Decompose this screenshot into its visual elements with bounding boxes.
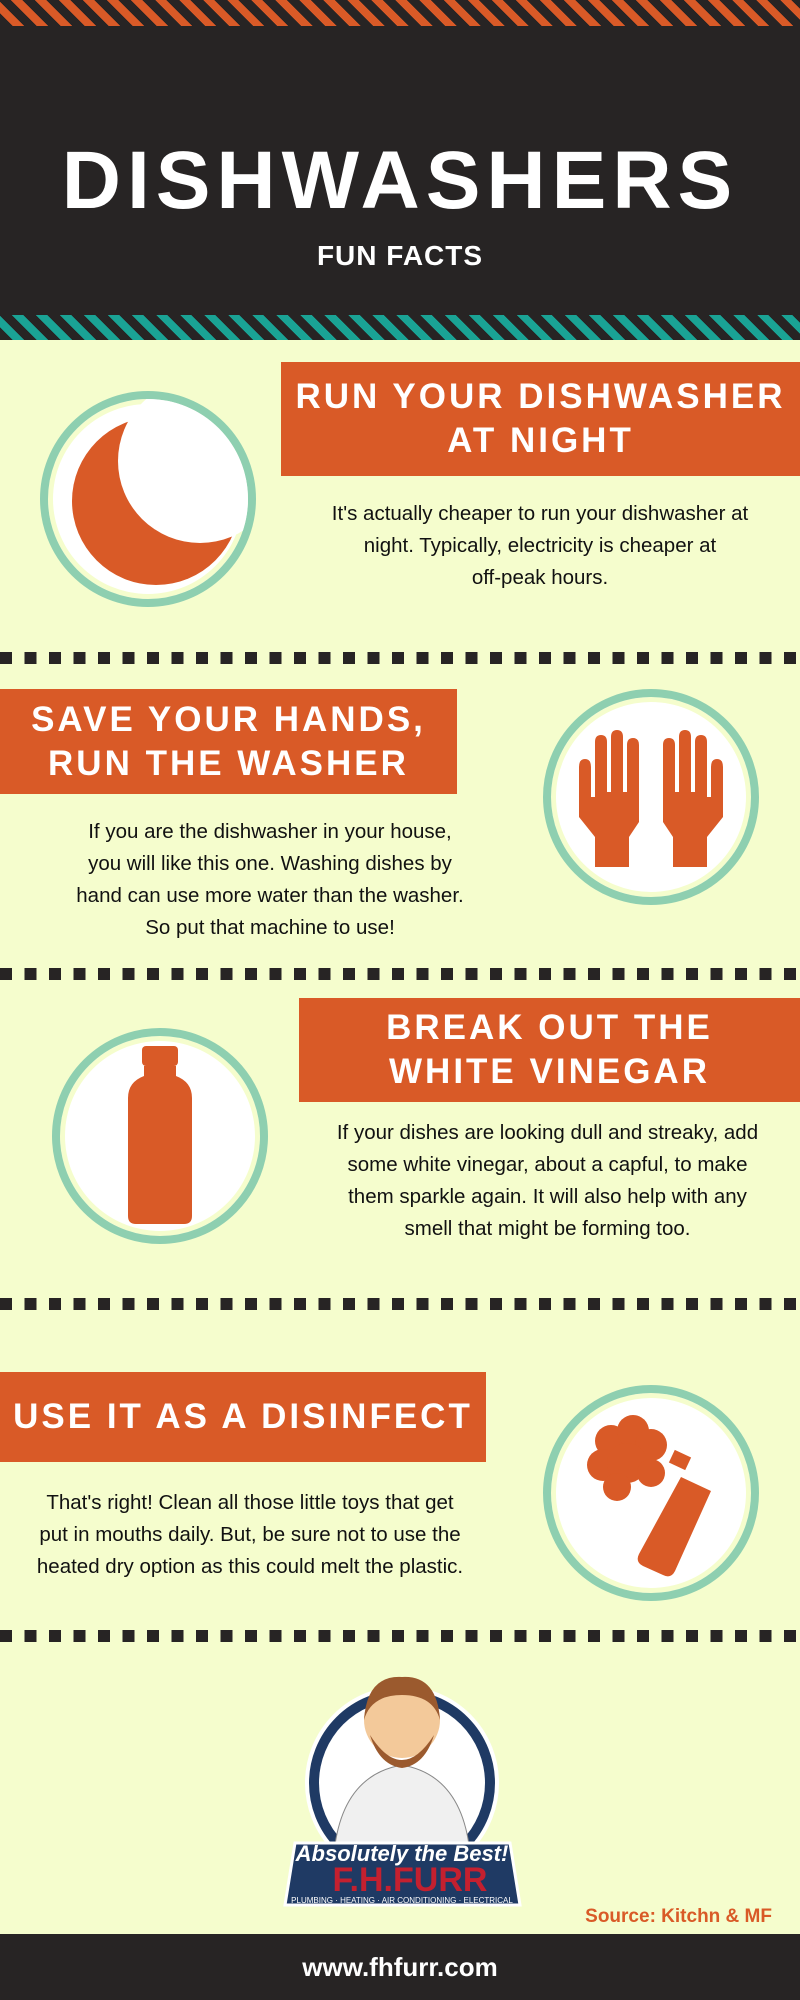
footer xyxy=(0,1934,800,2000)
text: smell that might be forming too. xyxy=(404,1217,690,1240)
subtitle: FUN FACTS xyxy=(317,240,483,271)
text: you will like this one. Washing dishes by xyxy=(88,852,452,875)
icon: hands xyxy=(543,689,759,905)
heading: RUN THE WASHER xyxy=(48,744,409,782)
icon: bottle xyxy=(52,1028,268,1244)
text: That's right! Clean all those little toys that get xyxy=(46,1491,454,1514)
text xyxy=(37,1491,463,1578)
heading: AT NIGHT xyxy=(447,421,634,460)
text: some white vinegar, about a capful, to make xyxy=(348,1153,747,1176)
text: So put that machine to use! xyxy=(145,916,395,939)
panel: vinegar xyxy=(52,998,800,1244)
title: DISHWASHERS xyxy=(62,135,738,226)
url: www.fhfurr.com xyxy=(302,1952,498,1982)
logo: Absolutely the Best! xyxy=(295,1841,508,1866)
logo xyxy=(283,1676,522,1906)
heading xyxy=(299,998,800,1102)
teal stripe xyxy=(0,315,800,340)
heading: USE IT AS A DISINFECT xyxy=(13,1397,473,1436)
heading: RUN YOUR DISHWASHER xyxy=(295,377,786,416)
icon: spray xyxy=(543,1385,759,1601)
icon: moon xyxy=(40,391,256,607)
text: heated dry option as this could melt the plastic. xyxy=(37,1555,463,1578)
heading: BREAK OUT THE xyxy=(386,1008,713,1047)
text: hand can use more water than the washer. xyxy=(76,884,464,907)
text: If you are the dishwasher in your house, xyxy=(88,820,452,843)
text: It's actually cheaper to run your dishwasher at xyxy=(332,502,748,525)
text: off-peak hours. xyxy=(472,566,608,589)
text: If your dishes are looking dull and streaky, add xyxy=(337,1121,758,1144)
logo: PLUMBING · HEATING · AIR CONDITIONING · ELECTRICAL xyxy=(291,1896,513,1905)
text: night. Typically, electricity is cheaper at xyxy=(364,534,716,557)
text: them sparkle again. It will also help with any xyxy=(348,1185,747,1208)
heading xyxy=(281,362,800,476)
source: Source: Kitchn & MF xyxy=(585,1906,772,1927)
top stripe xyxy=(0,0,800,26)
text xyxy=(337,1121,758,1240)
heading xyxy=(0,689,457,794)
text xyxy=(332,502,748,589)
panel: hands xyxy=(0,689,759,939)
panel: night xyxy=(40,362,800,607)
header panel xyxy=(0,26,800,315)
heading: SAVE YOUR HANDS, xyxy=(31,700,426,738)
panel: disinfect xyxy=(0,1372,759,1601)
logo: F.H.FURR xyxy=(333,1861,487,1899)
text xyxy=(76,820,464,939)
text: put in mouths daily. But, be sure not to use the xyxy=(39,1523,461,1546)
heading: WHITE VINEGAR xyxy=(389,1052,710,1091)
heading xyxy=(0,1372,486,1462)
